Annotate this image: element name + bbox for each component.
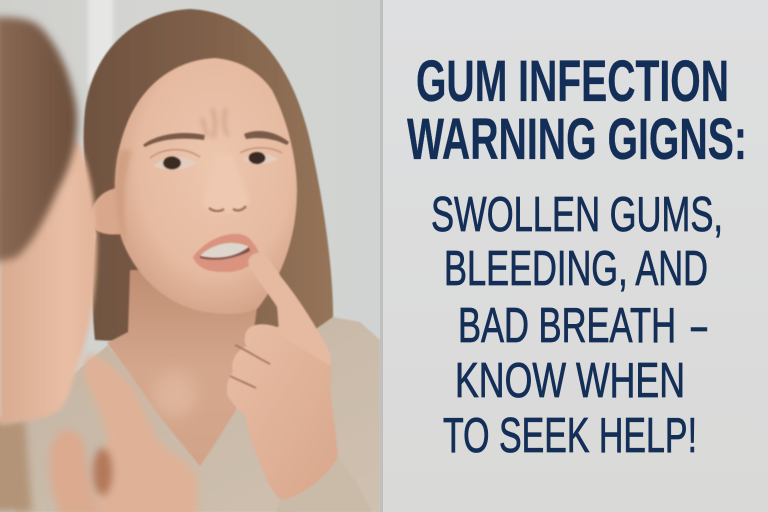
mirror frame edge xyxy=(380,0,383,512)
title xyxy=(407,49,747,172)
back of hand and curled fingers xyxy=(227,324,338,502)
chest highlight xyxy=(154,375,196,416)
cheek shadow xyxy=(116,150,132,245)
pointing finger xyxy=(248,253,331,366)
subtitle text block xyxy=(431,188,723,463)
nose xyxy=(232,191,245,208)
ear xyxy=(90,188,122,234)
subtitle text block: KNOW WHEN xyxy=(455,354,685,408)
mirror wall background xyxy=(0,0,380,369)
shadow between fingers xyxy=(93,448,113,496)
mouth xyxy=(193,234,259,272)
panel: mirror photo xyxy=(0,0,381,512)
foreground hair xyxy=(0,17,77,262)
frown lines xyxy=(202,108,228,138)
sweater cuff xyxy=(276,457,372,512)
foreground hand xyxy=(50,355,198,512)
mirrored woman xyxy=(15,9,380,512)
sweater xyxy=(15,317,380,512)
eyes xyxy=(150,148,282,170)
neck xyxy=(107,270,262,467)
subtitle text block: – xyxy=(691,299,707,353)
long hair behind xyxy=(84,9,333,345)
second finger xyxy=(50,430,100,512)
panel: text background xyxy=(381,0,768,512)
foreground face xyxy=(0,140,97,425)
finger creases xyxy=(230,345,270,388)
pointing hand xyxy=(227,253,372,512)
face xyxy=(115,58,297,314)
foreground blurred woman xyxy=(0,17,198,512)
foreground shoulder hair xyxy=(0,420,32,512)
eyebrows xyxy=(143,133,205,147)
subtitle text block: BAD BREATH xyxy=(458,299,676,353)
